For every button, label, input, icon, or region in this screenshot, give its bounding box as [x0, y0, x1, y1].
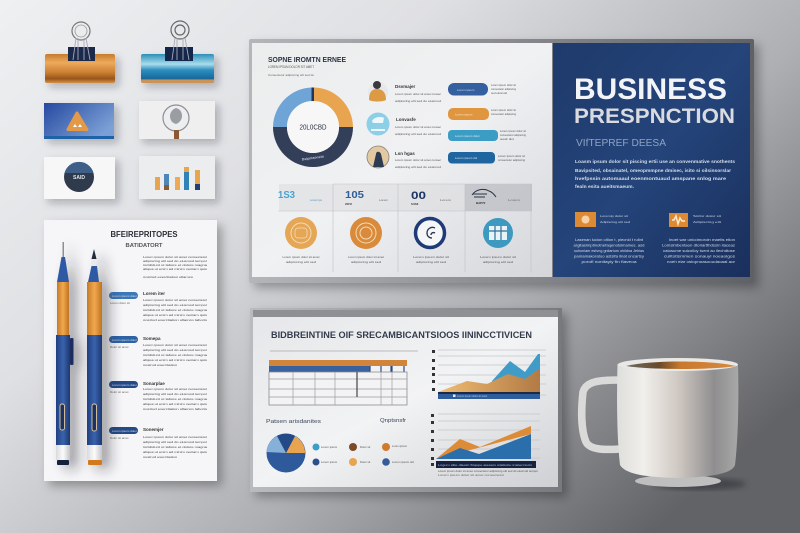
document intro text: Lorem ipsum dolor sit amet consectetur [143, 255, 207, 259]
profile row 2: Lorem ipsum dolor sit amet consec [395, 125, 442, 129]
pill label 3: Lorem ipsum dolor [455, 134, 480, 138]
document section 2 [109, 336, 208, 367]
icon circle 3: Lorem ipsum dolor sit [413, 255, 449, 259]
card: magnifier icon [139, 101, 215, 139]
document section 4 [109, 427, 208, 459]
document section 4: nostrud exercitation [143, 455, 178, 459]
document intro text: nostrud exercitation ullamco [143, 275, 194, 279]
footer text right: lnoet war unicdmoroin maetis etion [669, 238, 735, 242]
document section 3: Lorem ipsum dolor sit amet consectetur [143, 387, 207, 391]
document section 4: Sonemjer [143, 427, 164, 432]
document section 2: Dolor sit amet [110, 345, 129, 349]
pie legend: Lorem ipsum dol [392, 460, 414, 464]
document subtitle: BATIDATORT [126, 243, 162, 249]
pill label 2: consectetur adipiscing [491, 113, 517, 116]
description: Bavipsited, obsainatel, omeopmmpne dmisec, isito si oilsinsorslar [575, 168, 731, 174]
line chart bottom: Lngum slite diseid rhiqupe atesam wisitioitu insiterctorin [438, 463, 532, 467]
donut chart [273, 88, 353, 167]
pie legend: Lorem ipsum [321, 445, 338, 449]
stat 4: Lorem [508, 198, 521, 202]
feature icon 1: Loremip dolor sit [600, 214, 628, 218]
profile row 1: Dsvmajer [395, 84, 416, 89]
document section 3: Lorem ipsum dolor [112, 383, 137, 387]
data table [269, 351, 418, 405]
card: blue warning triangle [44, 103, 114, 139]
icon circle 2 [348, 217, 384, 264]
document section 2: Somepa [143, 336, 161, 341]
binder clip card: orange [45, 22, 115, 83]
footer text right: Lomsimbentaon dtoriartthdssin ilaceaz [662, 244, 736, 248]
pie section label right: Qnptsnsfr [380, 418, 406, 424]
footer text right [662, 238, 736, 264]
stat 1 [278, 190, 323, 202]
profile row 3: Lsn hgas [395, 151, 415, 156]
donut chart: Dsipmsonsto [302, 154, 324, 162]
pill label 2: Lorem ipsum dolor sit [491, 109, 516, 112]
stat 3: S3S8 [411, 202, 419, 206]
stat 3: 00 [411, 190, 426, 202]
profile row 2: adipiscing elit sed do eiusmod [395, 132, 442, 136]
feature icon 2 [669, 213, 721, 227]
footer text right: noeh eiar ostopnoasooudaoaal aor [667, 260, 736, 264]
panel: analytics board [250, 308, 562, 492]
document section 3: nostrud exercitation ullamco laboris [143, 407, 208, 411]
stat 3 [411, 190, 452, 206]
document section 1: Lorem ipsum dolor sit amet consectetur [143, 298, 207, 302]
card: dark circle badge: SAID [73, 175, 85, 181]
document section 1: adipiscing elit sed do eiusmod tempor [143, 303, 207, 307]
feature icon 2: Adipiscing elit [693, 220, 721, 224]
binder clip card: blue [141, 21, 214, 83]
card: mini bar chart [139, 156, 215, 199]
document section 1: Lorem ipsum dolor [112, 294, 137, 298]
pill label 4: Lorem ipsum dol [455, 156, 478, 160]
profile row 2 [366, 112, 442, 136]
document section 3: Sonarplae [143, 381, 165, 386]
icon: coffee mug [582, 358, 746, 490]
line chart bottom [431, 414, 540, 477]
pie chart [266, 434, 306, 472]
analytics heading: BIDBREINTINE OIF SRECAMBICANTSIOOS IININCCTIVICEN [271, 330, 532, 340]
footer text right: catosume suicoiloy tuent au ilechdtose [663, 249, 735, 253]
pie legend [312, 443, 414, 466]
footer text right: cuiltotismmen sonauyl noeaoigos [664, 254, 736, 258]
icon circle 4: adipiscing elit sed [483, 260, 513, 264]
footer text left: porofl nonitayiy fin fiaveoa [582, 260, 637, 264]
profile row 3: adipiscing elit sed do eiusmod [395, 165, 442, 169]
description: Loasm ipsum dolor sit piscing ertii use an convenmative snothents [575, 159, 735, 165]
pill label 4 [448, 152, 526, 164]
pill label 2 [448, 108, 517, 120]
document section 1 [109, 291, 208, 322]
line chart top: Lorem ipsum dolor sit amet [457, 395, 487, 398]
panel: left white content area: Consectetur adipiscing elit sed do [268, 73, 314, 77]
document section 3: incididunt ut labore et dolore magna [143, 397, 208, 401]
document intro text: aliqua ut enim ad minim veniam quis [143, 267, 208, 271]
icon circle 1 [282, 217, 320, 264]
pill label 1: Lorem ipsum [457, 88, 475, 92]
document section 3: aliqua ut enim ad minim veniam quis [143, 402, 208, 406]
document section 1: Lorem iter [143, 291, 165, 296]
document section 2: nostrud exercitation [143, 363, 178, 367]
document section 4: incididunt ut labore et dolore magna [143, 445, 208, 449]
profile row 1: Lorem ipsum dolor sit amet consec [395, 92, 442, 96]
icon circle 2: Lorem ipsum dolor sit amet [348, 255, 384, 259]
stat 1: 1S3 [278, 190, 295, 201]
profile row 2: Lonvasfe [396, 117, 416, 122]
stat 2: 105 [345, 189, 364, 201]
footer text left: pamamakoratoo astsifa ilnat oncartsy [574, 254, 645, 258]
document section 2: aliqua ut enim ad minim veniam quis [143, 358, 208, 362]
document section 1: nostrud exercitation ullamco laboris [143, 318, 208, 322]
document intro text [143, 255, 208, 279]
icon circle 3 [413, 218, 449, 264]
document section 4: Lorem ipsum dolor sit amet consectetur [143, 435, 207, 439]
profile row 1 [368, 81, 442, 103]
heading: SOPNE IROMTN ERNEE [268, 55, 346, 64]
pie legend: Dolor sit [360, 460, 370, 464]
feature icon 1 [575, 212, 630, 227]
document section 1: incididunt ut labore et dolore magna [143, 308, 208, 312]
subheading: LOREM IPSUM DOLOR SIT AMET [268, 65, 315, 69]
document section 4: aliqua ut enim ad minim veniam quis [143, 450, 208, 454]
pie legend: Lorem ipsum [321, 460, 338, 464]
stats and icons grid [278, 184, 532, 272]
icon circle 2: adipiscing elit sed [351, 260, 381, 264]
document intro text: incididunt ut labore et dolore magna [143, 263, 208, 267]
footer text left [574, 238, 645, 264]
pill label 4: Lorem ipsum dolor sit [498, 155, 525, 158]
feature icon 2: Sinfor dolor sit [693, 214, 721, 218]
pie section label left: Patsen arisdanites [266, 419, 321, 425]
pill label 3: consectetur adipiscing [500, 134, 527, 137]
pill label 3: sed do [500, 138, 515, 141]
document section 3: Dolor sit amet [110, 390, 129, 394]
line chart top [432, 350, 546, 399]
document section 4: Dolor sit amet [110, 436, 129, 440]
document section 1: Lorem dolor sit [110, 301, 130, 305]
document section 4: adipiscing elit sed do eiusmod tempor [143, 440, 207, 444]
document section 3: adipiscing elit sed do eiusmod tempor [143, 392, 207, 396]
document intro text: adipiscing elit sed do eiusmod tempor [143, 259, 207, 263]
panel: left white content area [252, 43, 552, 277]
stat 3: Lorem [440, 198, 452, 202]
document section 2: adipiscing elit sed do eiusmod tempor [143, 348, 207, 352]
panel: navy title area [553, 43, 750, 277]
document section 4: Lorem ipsum dolor [112, 429, 137, 433]
subtitle: VIfTEPREF DEESA [576, 138, 666, 149]
document title: BFEIREPRITOPES [110, 230, 178, 239]
icon circle 3: adipiscing elit sed [416, 260, 446, 264]
document section 2: Lorem ipsum dolor [112, 338, 137, 342]
icon: left pen [56, 242, 74, 465]
card: dark circle badge [44, 157, 115, 199]
pill label 1: Lorem ipsum dolor sit [491, 84, 516, 87]
stat 4: BdP70 [476, 201, 486, 205]
document section 2: Lorem ipsum dolor sit amet consectetur [143, 343, 207, 347]
pie legend: Lorem ipsum [392, 444, 408, 448]
icon: right pen [87, 249, 102, 465]
pill label 1 [448, 83, 517, 96]
line chart bottom: Lorem ipsum dolor sit amet consectetur adipiscing elit sed do eiusmod tempor [438, 470, 538, 473]
donut chart: 20L0CBD [300, 124, 326, 132]
icon circle 1: Lorem ipsum dolor sit amet [282, 255, 320, 259]
title line 1: BUSINESS [574, 73, 727, 106]
stat 2 [345, 189, 389, 206]
document section 3 [109, 381, 208, 411]
stat 1: Lorem ips [310, 198, 323, 202]
document section 1: aliqua ut enim ad minim veniam quis [143, 313, 208, 317]
icon circle 4: Lorem ipsum dolor sit [480, 255, 516, 259]
footer text left: Lasenan lucion oltion t, piecnid t rulint [575, 238, 643, 242]
stat 4 [472, 189, 521, 205]
panel: document sheet with pens [44, 220, 217, 481]
pill label 3: Lorem ipsum dolor sit [500, 130, 526, 133]
feature icon 1: Adipiscing elit sed [600, 220, 630, 224]
profile row 3: Lorem ipsum dolor sit amet consec [395, 158, 442, 162]
document section 2: incididunt ut labore et dolore magna [143, 353, 208, 357]
icon circle 1: adipiscing elit sed [286, 260, 316, 264]
profile row 1: adipiscing elit sed do eiusmod [395, 99, 442, 103]
pill label 1: consectetur adipiscing [491, 88, 517, 91]
footer text left: argitasimptinotnefaqenotsimaines. asd [574, 244, 645, 248]
description: fealn esita aueitsmaeum. [575, 184, 634, 190]
line chart bottom: Lorem ipsum dolor sit amet consectetur [438, 474, 504, 477]
title line 2: PRESPNCTION [574, 105, 735, 128]
pill label 1: sed eiusmod [491, 92, 508, 95]
stat 2: 20F8 [345, 202, 352, 206]
pill label 3 [448, 130, 527, 141]
footer text left: suhoniam estvng gnilartum ohildna Jehlas [574, 249, 644, 253]
pie legend: Dolor sit [360, 445, 370, 449]
description [575, 159, 735, 190]
stat 2: Lorem [379, 198, 389, 202]
profile row 3 [367, 146, 442, 169]
pill label 2: Lorem ipsum [455, 112, 473, 116]
panel: main presentation board [249, 39, 754, 283]
description: hvefpssin automaaul eoenmontuaud amspane snlog mare [575, 176, 726, 182]
icon circle 4 [480, 218, 516, 264]
pill label 4: consectetur adipiscing [498, 159, 526, 162]
